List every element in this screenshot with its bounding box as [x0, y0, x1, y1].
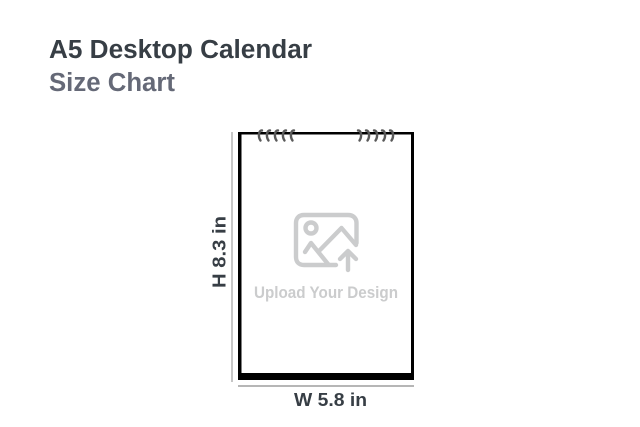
- calendar page: [238, 130, 414, 380]
- title: A5 Desktop Calendar: [49, 36, 312, 64]
- right spiral binding: [358, 130, 393, 140]
- icon: upload image placeholder: [296, 215, 356, 270]
- width dimension line: [238, 385, 414, 387]
- upload label: Upload Your Design: [254, 284, 398, 302]
- height label: H 8.3 in: [208, 216, 230, 288]
- calendar frame: [238, 132, 414, 380]
- subtitle: Size Chart: [49, 69, 176, 97]
- width label: W 5.8 in: [294, 389, 367, 410]
- left spiral binding: [259, 130, 294, 140]
- height dimension line: [231, 132, 233, 382]
